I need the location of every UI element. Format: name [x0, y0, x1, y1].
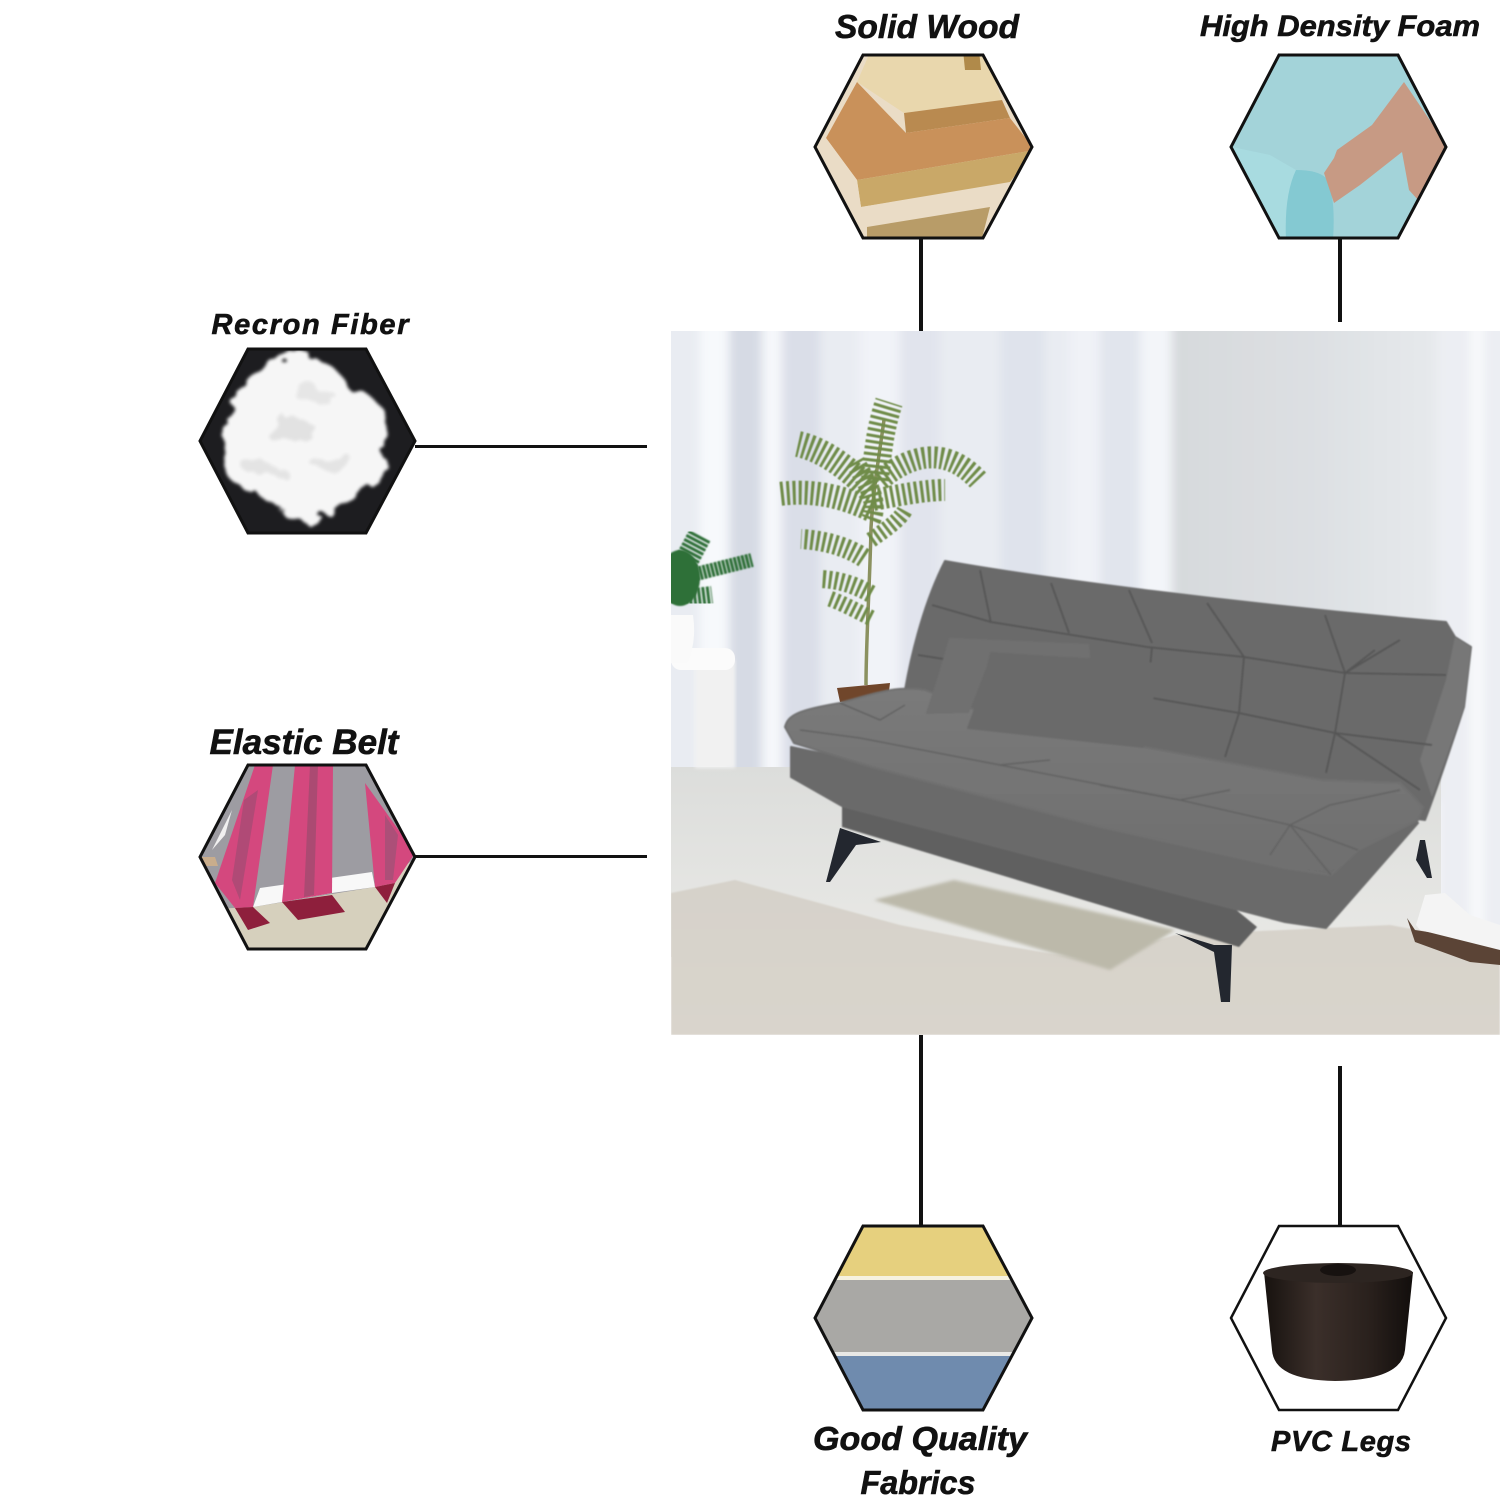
connector: solid wood to photo [919, 238, 923, 331]
backrest side panel [1420, 637, 1471, 797]
heading: good quality fabrics [813, 1420, 1029, 1500]
photo: sofa in living room [650, 320, 1500, 1035]
sofa legs [826, 828, 1432, 1002]
sofa backrest [905, 561, 1471, 820]
heading: recron fiber: Recron Fiber [212, 309, 410, 341]
floor [671, 767, 1441, 957]
left plant and side table [660, 535, 752, 768]
curtains [650, 320, 1500, 940]
sofa base lower [842, 805, 1257, 947]
connector: fabrics to photo [919, 1035, 923, 1226]
sofa seat cushion [783, 686, 1420, 822]
potted palm [779, 402, 978, 702]
icon: elastic belt hexagon [195, 760, 420, 955]
heading: good quality fabrics: Good Quality [813, 1420, 1029, 1457]
sofa base front [791, 747, 1418, 928]
rug shadow under sofa [874, 880, 1175, 970]
icon: recron fiber hexagon [195, 345, 420, 540]
connector: high density foam to photo [1338, 238, 1342, 322]
connector: pvc legs to photo [1338, 1066, 1342, 1226]
icon: fabrics hexagon [810, 1222, 1040, 1414]
front pillow [968, 662, 1154, 746]
heading: high density foam: High Density Foam [1200, 10, 1480, 43]
heading: solid wood: Solid Wood [835, 8, 1020, 45]
connector: recron fiber to photo [415, 445, 647, 448]
seat tufting [800, 703, 1400, 875]
rug [671, 880, 1500, 1035]
heading: elastic belt: Elastic Belt [210, 723, 400, 762]
icon: high density foam hexagon [1225, 50, 1450, 245]
book [1407, 893, 1500, 965]
icon: pvc legs hexagon [1225, 1222, 1450, 1417]
back pillow [928, 658, 968, 713]
connector: elastic belt to photo [415, 855, 647, 858]
icon: solid wood hexagon [810, 50, 1040, 245]
backrest tufting [918, 570, 1446, 790]
heading: pvc legs: PVC Legs [1271, 1426, 1411, 1458]
heading: good quality fabrics: Fabrics [860, 1464, 976, 1500]
